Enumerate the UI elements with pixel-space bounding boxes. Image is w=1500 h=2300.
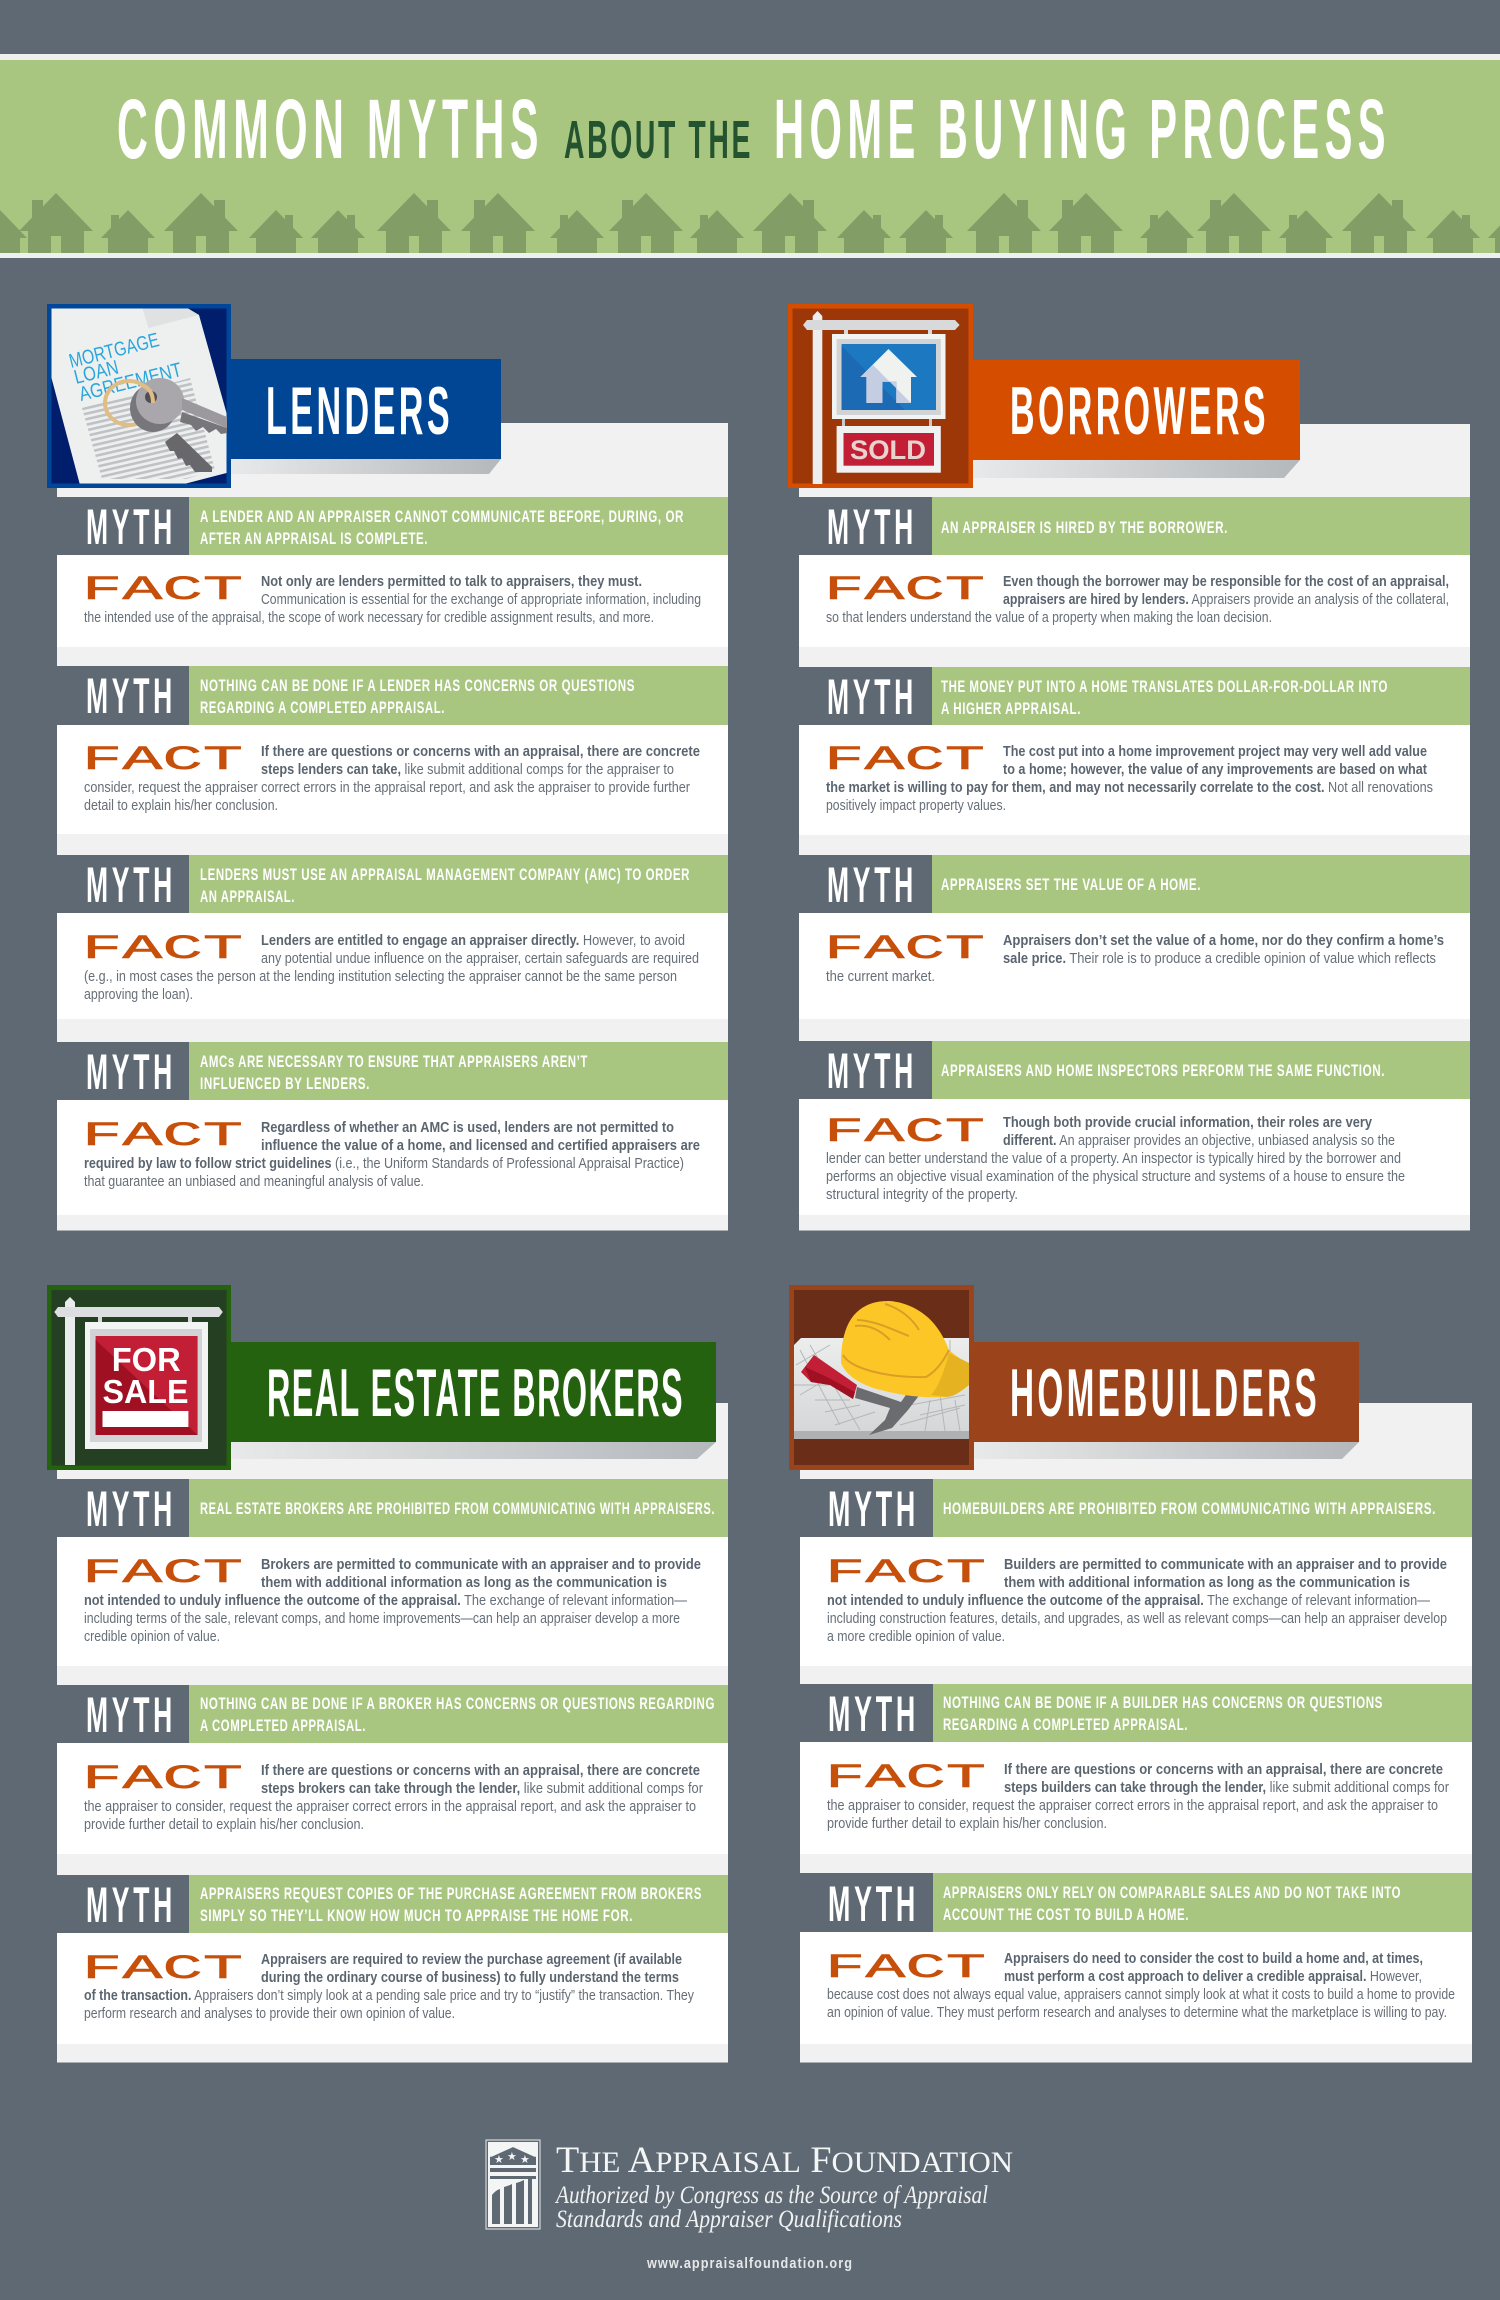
- fact 2: FACT: [824, 742, 985, 780]
- myth 1: MYTH: [828, 1481, 919, 1537]
- fact 1: Not only are lenders permitted to talk to appraisers, they must.: [261, 574, 642, 590]
- fact 1: FACT: [824, 572, 985, 610]
- myth 2: MYTH: [86, 1687, 176, 1743]
- fact 3: must perform a cost approach to deliver a credible appraisal. However,: [1004, 1969, 1422, 1985]
- fact 4: performs an objective visual examination of the physical structure and systems of a house to ensure the: [826, 1169, 1405, 1185]
- myth 4: MYTH: [827, 1043, 917, 1099]
- fact 3: FACT: [82, 1951, 243, 1989]
- myth 3: AN APPRAISAL.: [200, 887, 295, 906]
- website url: www.appraisalfoundation.org: [646, 2256, 853, 2272]
- icon: hard hat, hammer and blueprint: [789, 1285, 974, 1470]
- fact 1: including terms of the sale, relevant comps, and home improvements—can help an appraiser develop a more: [84, 1611, 680, 1627]
- fact 2: steps lenders can take, like submit additional comps for the appraiser to: [261, 762, 674, 778]
- fact 2: If there are questions or concerns with an appraisal, there are concrete: [1004, 1762, 1443, 1778]
- icon: for sale sign: SALE: [102, 1373, 188, 1410]
- fact 3: sale price. Their role is to produce a credible opinion of value which reflects: [1003, 951, 1436, 967]
- icon: foundation logo: ★: [507, 2151, 517, 2163]
- banner: homebuilders heading: [974, 1342, 1359, 1459]
- myth 3: MYTH: [827, 857, 917, 913]
- panel: borrowers: [788, 304, 1470, 1231]
- myth 3: SIMPLY SO THEY’LL KNOW HOW MUCH TO APPRAISE THE HOME FOR.: [200, 1906, 633, 1925]
- row of house silhouettes: [0, 193, 1500, 253]
- panel background: [57, 423, 728, 1231]
- fact 1: Communication is essential for the exchange of appropriate information, including: [261, 592, 701, 608]
- fact 4: Though both provide crucial information, their roles are very: [1003, 1115, 1372, 1131]
- myth 1: [799, 497, 1470, 555]
- title text: [117, 82, 1391, 176]
- fact 2: to a home; however, the value of any improvements are based on what: [1003, 762, 1427, 778]
- fact 3: FACT: [824, 931, 985, 969]
- myth 2: REGARDING A COMPLETED APPRAISAL.: [200, 698, 445, 717]
- icon: foundation logo: ★: [494, 2154, 504, 2166]
- fact 3: the current market.: [826, 969, 935, 985]
- fact 4: [799, 1099, 1470, 1215]
- icon: foundation logo: [486, 2140, 540, 2229]
- myth 1: [57, 1479, 728, 1537]
- myth 4: [57, 1042, 728, 1100]
- fact 2: positively impact property values.: [826, 798, 1006, 814]
- fact 3: approving the loan).: [84, 987, 193, 1003]
- myth 3: [57, 1875, 728, 1933]
- myth 3: MYTH: [86, 857, 176, 913]
- banner: lenders heading: [231, 359, 501, 474]
- fact 2: If there are questions or concerns with an appraisal, there are concrete: [261, 1763, 700, 1779]
- fact 3: Lenders are entitled to engage an appraiser directly. However, to avoid: [261, 933, 685, 949]
- banner: borrowers heading: [973, 360, 1300, 478]
- myth 4: [799, 1041, 1470, 1099]
- myth 2: [57, 666, 728, 725]
- myth 4: INFLUENCED BY LENDERS.: [200, 1074, 370, 1093]
- myth 1: [800, 1479, 1472, 1537]
- myth 1: MYTH: [827, 499, 917, 555]
- fact 3: (e.g., in most cases the person at the lending institution selecting the appraiser cannot be the same person: [84, 969, 677, 985]
- fact 2: [57, 1743, 728, 1854]
- myth 3: MYTH: [86, 1877, 176, 1933]
- fact 1: a more credible opinion of value.: [827, 1629, 1005, 1645]
- fact 3: Appraisers don’t set the value of a home, nor do they confirm a home’s: [1003, 933, 1444, 949]
- fact 1: not intended to unduly influence the outcome of the appraisal. The exchange of relevant information—: [84, 1593, 687, 1609]
- fact 1: FACT: [825, 1555, 986, 1593]
- fact 4: influence the value of a home, and licensed and certified appraisers are: [261, 1138, 700, 1154]
- myth 3: APPRAISERS REQUEST COPIES OF THE PURCHASE AGREEMENT FROM BROKERS: [200, 1884, 702, 1903]
- myth 3: [799, 855, 1470, 913]
- icon: for sale sign: FOR: [112, 1341, 181, 1378]
- fact 3: during the ordinary course of business) to fully understand the terms: [261, 1970, 679, 1986]
- fact 4: [57, 1100, 728, 1215]
- icon: sold sign: [788, 304, 973, 488]
- myth 3: ACCOUNT THE COST TO BUILD A HOME.: [943, 1905, 1189, 1924]
- myth 3: [57, 855, 728, 913]
- tagline: [554, 2182, 988, 2233]
- fact 2: the market is willing to pay for them, and may not necessarily correlate to the cost. Not all renovations: [826, 780, 1433, 796]
- fact 3: Appraisers are required to review the purchase agreement (if available: [261, 1952, 682, 1968]
- fact 1: them with additional information as long as the communication is: [261, 1575, 667, 1591]
- myth 2: [800, 1684, 1472, 1742]
- myth 1: AFTER AN APPRAISAL IS COMPLETE.: [200, 529, 428, 548]
- fact 2: steps brokers can take through the lender, like submit additional comps for: [261, 1781, 703, 1797]
- fact 1: appraisers are hired by lenders. Appraisers provide an analysis of the collateral,: [1003, 592, 1449, 608]
- myth 3: [800, 1873, 1472, 1932]
- fact 3: [800, 1932, 1472, 2044]
- fact 2: steps builders can take through the lender, like submit additional comps for: [1004, 1780, 1449, 1796]
- icon: mortgage agreement and keys: AGREEMENT: [77, 359, 184, 406]
- fact 4: Regardless of whether an AMC is used, lenders are not permitted to: [261, 1120, 674, 1136]
- title text: COMMON MYTHS: [117, 82, 544, 176]
- myth 1: [57, 497, 728, 555]
- fact 1: Brokers are permitted to communicate with an appraiser and to provide: [261, 1557, 701, 1573]
- myth 3: LENDERS MUST USE AN APPRAISAL MANAGEMENT COMPANY (AMC) TO ORDER: [200, 865, 690, 884]
- myth 4: MYTH: [86, 1044, 176, 1100]
- myth 1: A LENDER AND AN APPRAISER CANNOT COMMUNICATE BEFORE, DURING, OR: [200, 507, 684, 526]
- footer: the appraisal foundation: [486, 2140, 1013, 2272]
- fact 2: FACT: [825, 1760, 986, 1798]
- myth 2: NOTHING CAN BE DONE IF A LENDER HAS CONCERNS OR QUESTIONS: [200, 676, 635, 695]
- panel background: [799, 424, 1470, 1231]
- title text: ABOUT THE: [564, 110, 753, 170]
- banner: real estate brokers heading: REAL ESTATE BROKERS: [267, 1355, 684, 1431]
- fact 2: FACT: [82, 1761, 243, 1799]
- panel background: [57, 1403, 728, 2063]
- icon: for sale sign: [47, 1285, 231, 1470]
- fact 1: [57, 555, 728, 647]
- fact 1: the intended use of the appraisal, the scope of work necessary for credible assignment results, and more.: [84, 610, 654, 626]
- fact 1: [799, 555, 1470, 647]
- panel: real estate brokers: [47, 1285, 728, 2063]
- title banner: [0, 54, 1500, 258]
- myth 2: A HIGHER APPRAISAL.: [941, 699, 1081, 718]
- fact 2: the appraiser to consider, request the appraiser correct errors in the appraisal report, and ask the appraiser to: [84, 1799, 696, 1815]
- fact 3: Appraisers do need to consider the cost to build a home and, at times,: [1004, 1951, 1423, 1967]
- icon: foundation logo: ★: [520, 2154, 530, 2166]
- fact 2: [57, 725, 728, 834]
- fact 4: that guarantee an unbiased and meaningful analysis of value.: [84, 1174, 424, 1190]
- fact 2: If there are questions or concerns with an appraisal, there are concrete: [261, 744, 700, 760]
- myth 2: A COMPLETED APPRAISAL.: [200, 1716, 366, 1735]
- fact 2: [800, 1742, 1472, 1854]
- fact 1: Builders are permitted to communicate with an appraiser and to provide: [1004, 1557, 1447, 1573]
- fact 2: provide further detail to explain his/her conclusion.: [84, 1817, 364, 1833]
- fact 4: lender can better understand the value of a property. An inspector is typically hired by the borrower and: [826, 1151, 1401, 1167]
- myth 2: REGARDING A COMPLETED APPRAISAL.: [943, 1715, 1188, 1734]
- tagline: Authorized by Congress as the Source of Appraisal: [554, 2182, 988, 2209]
- myth 2: MYTH: [86, 668, 176, 724]
- myth 1: REAL ESTATE BROKERS ARE PROHIBITED FROM COMMUNICATING WITH APPRAISERS.: [200, 1499, 715, 1518]
- fact 1: not intended to unduly influence the outcome of the appraisal. The exchange of relevant information—: [827, 1593, 1430, 1609]
- fact 3: [799, 913, 1470, 1019]
- myth 4: AMCs ARE NECESSARY TO ENSURE THAT APPRAISERS AREN’T: [200, 1052, 588, 1071]
- tagline: Standards and Appraiser Qualifications: [556, 2206, 902, 2233]
- myth 2: [799, 667, 1470, 725]
- organization name: THE APPRAISAL FOUNDATION: [556, 2140, 1013, 2181]
- fact 4: different. An appraiser provides an objective, unbiased analysis so the: [1003, 1133, 1395, 1149]
- myth 3: MYTH: [828, 1876, 919, 1932]
- panel: lenders: [47, 304, 728, 1231]
- fact 3: any potential undue influence on the appraiser, certain safeguards are required: [261, 951, 699, 967]
- myth 3: APPRAISERS SET THE VALUE OF A HOME.: [941, 875, 1201, 894]
- fact 1: FACT: [82, 572, 243, 610]
- fact 1: [57, 1537, 728, 1666]
- fact 4: structural integrity of the property.: [826, 1187, 1018, 1203]
- fact 1: them with additional information as long as the communication is: [1004, 1575, 1410, 1591]
- icon: mortgage agreement and keys: [47, 304, 231, 488]
- icon: mortgage agreement and keys: LOAN: [72, 357, 121, 389]
- myth 2: [57, 1685, 728, 1743]
- fact 2: The cost put into a home improvement project may very well add value: [1003, 744, 1427, 760]
- icon: mortgage agreement and keys: MORTGAGE: [67, 329, 161, 373]
- fact 2: [799, 725, 1470, 835]
- fact 3: perform research and analyses to provide their own opinion of value.: [84, 2006, 455, 2022]
- myth 1: MYTH: [86, 1481, 176, 1537]
- fact 4: required by law to follow strict guidelines (i.e., the Uniform Standards of Professional Appraisal Practice): [84, 1156, 684, 1172]
- fact 1: FACT: [82, 1555, 243, 1593]
- fact 2: consider, request the appraiser correct errors in the appraisal report, and ask the appraiser to provide further: [84, 780, 690, 796]
- fact 3: FACT: [825, 1950, 986, 1988]
- fact 3: [57, 1933, 728, 2044]
- myth 2: MYTH: [827, 669, 917, 725]
- myth 2: NOTHING CAN BE DONE IF A BROKER HAS CONCERNS OR QUESTIONS REGARDING: [200, 1694, 715, 1713]
- myth 2: MYTH: [828, 1686, 919, 1742]
- fact 2: provide further detail to explain his/her conclusion.: [827, 1816, 1107, 1832]
- fact 3: [57, 913, 728, 1019]
- banner: real estate brokers heading: [231, 1342, 716, 1459]
- fact 2: FACT: [82, 742, 243, 780]
- fact 4: FACT: [824, 1114, 985, 1152]
- fact 3: of the transaction. Appraisers don’t simply look at a pending sale price and try to “justify” the transaction. They: [84, 1988, 695, 2004]
- panel: homebuilders: [789, 1285, 1472, 2063]
- fact 1: [800, 1537, 1472, 1666]
- fact 1: so that lenders understand the value of a property when making the loan decision.: [826, 610, 1272, 626]
- fact 2: detail to explain his/her conclusion.: [84, 798, 278, 814]
- panel background: [800, 1403, 1472, 2063]
- myth 1: AN APPRAISER IS HIRED BY THE BORROWER.: [941, 518, 1228, 537]
- banner: lenders heading: LENDERS: [266, 373, 453, 449]
- myth 1: MYTH: [86, 499, 176, 555]
- fact 1: credible opinion of value.: [84, 1629, 220, 1645]
- fact 3: FACT: [82, 931, 243, 969]
- fact 4: FACT: [82, 1118, 243, 1156]
- icon: sold sign: SOLD: [850, 435, 926, 465]
